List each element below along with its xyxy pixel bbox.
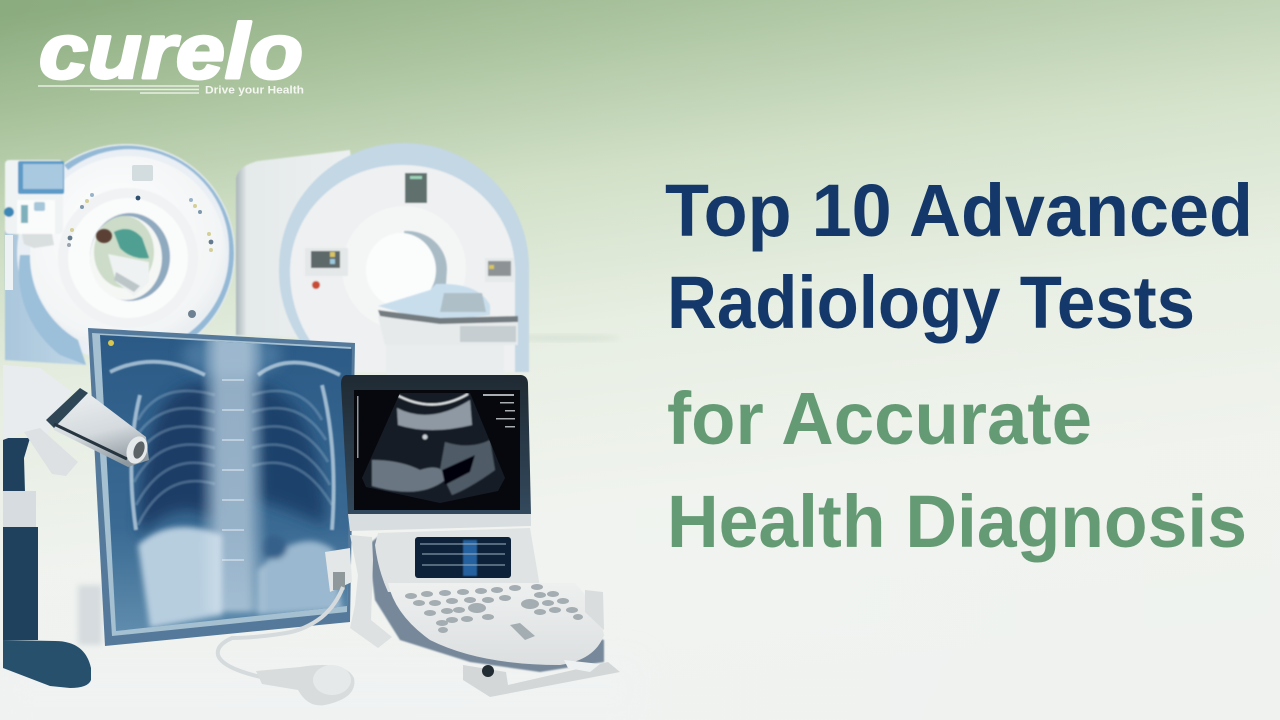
title line 3: for Accurate: [667, 377, 1092, 460]
arm bracket: [24, 428, 78, 476]
spine: [198, 335, 268, 612]
stand foot: [3, 640, 91, 688]
tube cone: [50, 390, 149, 467]
ultrasound base: [368, 535, 604, 672]
ultrasound image: [360, 390, 510, 505]
ultrasound readouts: [357, 394, 515, 458]
MRI top display: [405, 173, 427, 203]
illustration: ultrasound machine: [218, 375, 620, 705]
shoulders glow: [180, 340, 284, 377]
ultrasound monitor: [341, 375, 531, 531]
ultrasound probe: [256, 665, 354, 705]
probe cable: [218, 587, 343, 677]
X-ray film: [100, 335, 352, 631]
MRI left buttons: [305, 248, 348, 276]
ultrasound keyboard: [388, 583, 604, 665]
diaphragm: [138, 527, 342, 628]
probe holder: [325, 535, 392, 648]
MRI outer ring: [279, 143, 529, 372]
MRI table: [378, 284, 490, 322]
illustration: chest X-ray panel: [88, 328, 355, 646]
stand collar: [3, 491, 36, 527]
title line 1: Top 10 Advanced: [665, 169, 1253, 252]
X-ray label: [108, 340, 114, 346]
title: [665, 169, 1253, 563]
ribs: [134, 391, 332, 525]
stand column: [3, 438, 38, 640]
carry handle: [463, 660, 620, 697]
CT patient on table: [96, 229, 149, 296]
CT dots: [67, 165, 213, 318]
ultrasound control panel: [375, 528, 540, 592]
CT control unit: [4, 160, 64, 248]
illustration: MRI scanner: [236, 143, 529, 375]
logo speed lines: [38, 86, 199, 93]
MRI bore: [342, 206, 466, 330]
CT base: [5, 230, 85, 365]
clavicles and shoulders: [110, 362, 340, 530]
logo wordmark: curelo: [39, 7, 303, 95]
arm housing: [3, 365, 72, 440]
illustration: CT scanner: [4, 144, 235, 365]
logo tagline: Drive your Health: [205, 84, 304, 96]
title line 4: Health Diagnosis: [667, 480, 1247, 563]
title line 2: Radiology Tests: [667, 261, 1195, 344]
logo: curelo: [38, 7, 304, 96]
MRI face: [290, 165, 515, 372]
MRI right buttons: [485, 258, 514, 282]
tube lens: [123, 433, 151, 467]
X-ray anatomy: [110, 333, 342, 628]
illustration: X-ray arm with stand: [3, 365, 151, 688]
CT gantry: [17, 144, 235, 365]
MRI body: [236, 150, 370, 340]
ultrasound side handle: [585, 590, 604, 630]
X-ray frame: [88, 328, 355, 646]
lungs: [139, 384, 326, 535]
